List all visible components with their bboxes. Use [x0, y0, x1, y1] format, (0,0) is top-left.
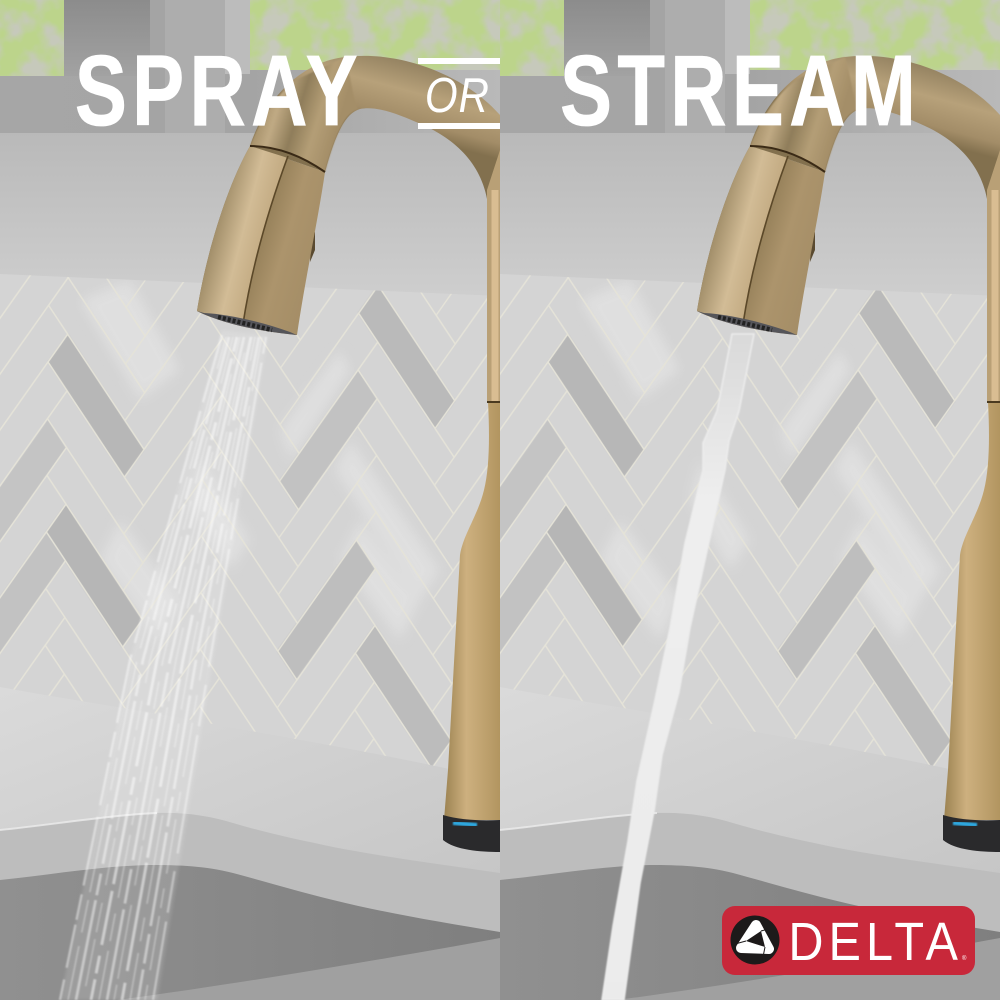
background: wall, tile, counter, sink: [467, 0, 1000, 1000]
faucet: [197, 56, 500, 852]
title: stream: STREAM: [560, 36, 921, 147]
wordmark: DELTA: [788, 911, 963, 972]
panel: spray: [0, 0, 500, 1000]
title: spray: SPRAY: [75, 36, 363, 147]
water spray: [60, 330, 268, 1000]
title: or: OR: [425, 68, 490, 123]
title: or: [418, 58, 500, 129]
panel: stream: [467, 0, 1000, 1000]
background: wall, tile, counter, sink: [0, 0, 500, 1000]
logo: Delta: ®: [962, 955, 967, 962]
faucet: [697, 56, 1000, 852]
logo: Delta: [722, 906, 975, 975]
icon: delta mark: [730, 916, 780, 964]
water stream: [602, 334, 754, 1000]
